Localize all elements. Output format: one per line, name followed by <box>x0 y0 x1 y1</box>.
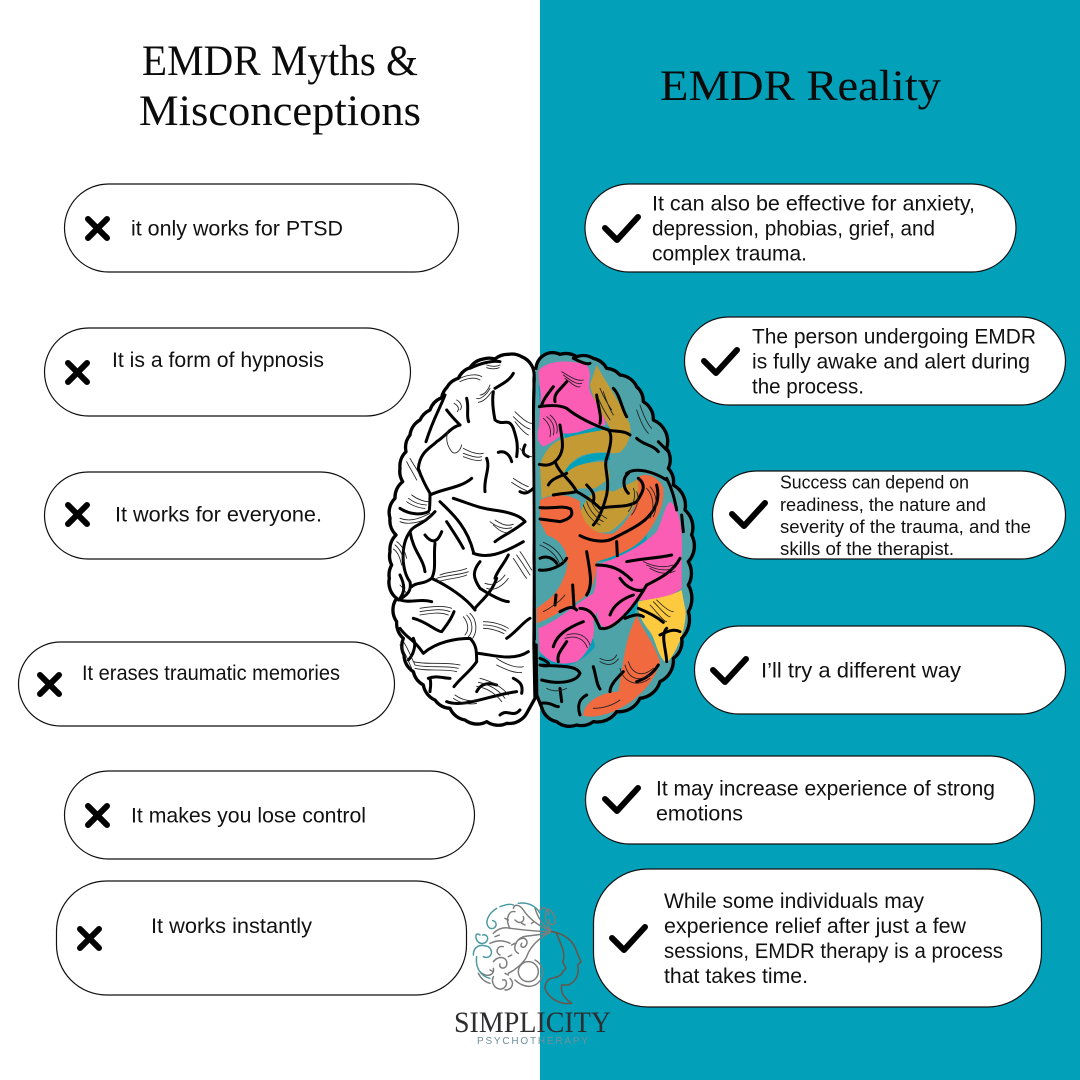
right hemisphere <box>535 353 694 726</box>
text: myth 5: It makes you lose control <box>131 804 366 828</box>
text: reality 3: severity of the trauma, and the <box>780 516 1031 537</box>
base teal region <box>535 353 694 726</box>
title: EMDR Myths and Misconceptions: EMDR Myths & <box>142 38 418 85</box>
logo: tree swirl mark <box>473 903 581 1004</box>
reality card: other conditions <box>585 184 1016 272</box>
text: reality 1 <box>652 192 975 266</box>
text: myth 6: It works instantly <box>151 914 312 938</box>
myth card: erases memories <box>18 642 394 726</box>
text: reality 3: readiness, the nature and <box>780 494 986 515</box>
text: reality 3: Success can depend on <box>780 472 969 492</box>
text: reality 1: depression, phobias, grief, and <box>652 216 935 240</box>
logo: leaves <box>490 918 534 975</box>
right outline <box>536 353 694 726</box>
illustration: brain <box>389 353 694 726</box>
text: reality 2: The person undergoing EMDR <box>752 324 1036 348</box>
text: reality 6 <box>664 889 1003 988</box>
myth card: lose control <box>64 771 474 859</box>
reality card: strong emotions <box>586 756 1034 844</box>
text: reality 6: that takes time. <box>664 964 808 988</box>
region: pink middle <box>538 502 682 664</box>
icon: cross <box>68 505 87 524</box>
text: reality 2: the process. <box>752 374 864 398</box>
region: pink top <box>538 362 605 447</box>
icon: check <box>605 217 638 240</box>
text: reality 2: is fully awake and alert during <box>752 350 1030 374</box>
myth card: hypnosis <box>44 328 410 416</box>
icon: check <box>612 927 645 950</box>
text: reality 2 <box>752 324 1036 398</box>
icon: cross <box>80 929 99 948</box>
hatching <box>393 365 532 704</box>
region: yellow <box>638 590 686 663</box>
text: reality 5: It may increase experience of strong <box>656 776 995 800</box>
text: reality 6: sessions, EMDR therapy is a process <box>664 939 1003 963</box>
text: reality 5 <box>656 776 995 826</box>
icon: cross <box>40 675 59 694</box>
reality card: different way <box>694 626 1066 714</box>
icon: check <box>605 788 638 811</box>
logo: wordmark: SIMPLICITY <box>454 1006 611 1039</box>
left hemisphere <box>389 354 536 725</box>
myth card: works for everyone <box>44 472 364 559</box>
icon: cross <box>88 219 107 238</box>
reality card: success depends <box>712 471 1066 559</box>
text: reality 6: experience relief after just a few <box>664 914 966 938</box>
title: EMDR Myths and Misconceptions <box>139 38 421 135</box>
myth card: only works for PTSD <box>64 184 458 272</box>
text: myth 2: It is a form of hypnosis <box>112 348 324 372</box>
text: myth 1: it only works for PTSD <box>131 216 343 240</box>
icon: check <box>704 350 737 373</box>
region: gold <box>540 365 630 498</box>
region: orange <box>537 475 664 623</box>
logo: twin face profiles <box>545 932 581 1004</box>
title: EMDR Reality: EMDR Reality <box>660 63 942 110</box>
title: EMDR Myths and Misconceptions: Misconceptions <box>139 88 421 135</box>
text: reality 1: It can also be effective for anxiety, <box>652 192 975 216</box>
text: reality 1: complex trauma. <box>652 242 807 266</box>
text: reality 6: While some individuals may <box>664 889 924 913</box>
icon: check <box>713 659 746 682</box>
reality card: takes time <box>594 869 1042 1007</box>
icon: check <box>732 503 765 526</box>
text: reality 5: emotions <box>656 802 743 826</box>
myth card: works instantly <box>56 881 466 995</box>
icon: cross <box>68 363 87 382</box>
text: reality 3: skills of the therapist. <box>780 538 954 559</box>
hatching <box>540 372 675 708</box>
text: myth 3: It works for everyone. <box>115 502 322 526</box>
text: reality 4: I’ll try a different way <box>761 658 961 682</box>
gaps showing background <box>538 385 647 667</box>
panel: teal reality background <box>540 0 1080 1080</box>
logo: Simplicity Psychotherapy <box>454 903 611 1047</box>
text: myth 4: It erases traumatic memories <box>82 661 340 685</box>
reality card: awake and alert <box>684 317 1066 405</box>
text: reality 3 <box>780 472 1031 559</box>
logo: tagline: PSYCHOTHERAPY <box>477 1036 588 1047</box>
icon: cross <box>88 806 107 825</box>
